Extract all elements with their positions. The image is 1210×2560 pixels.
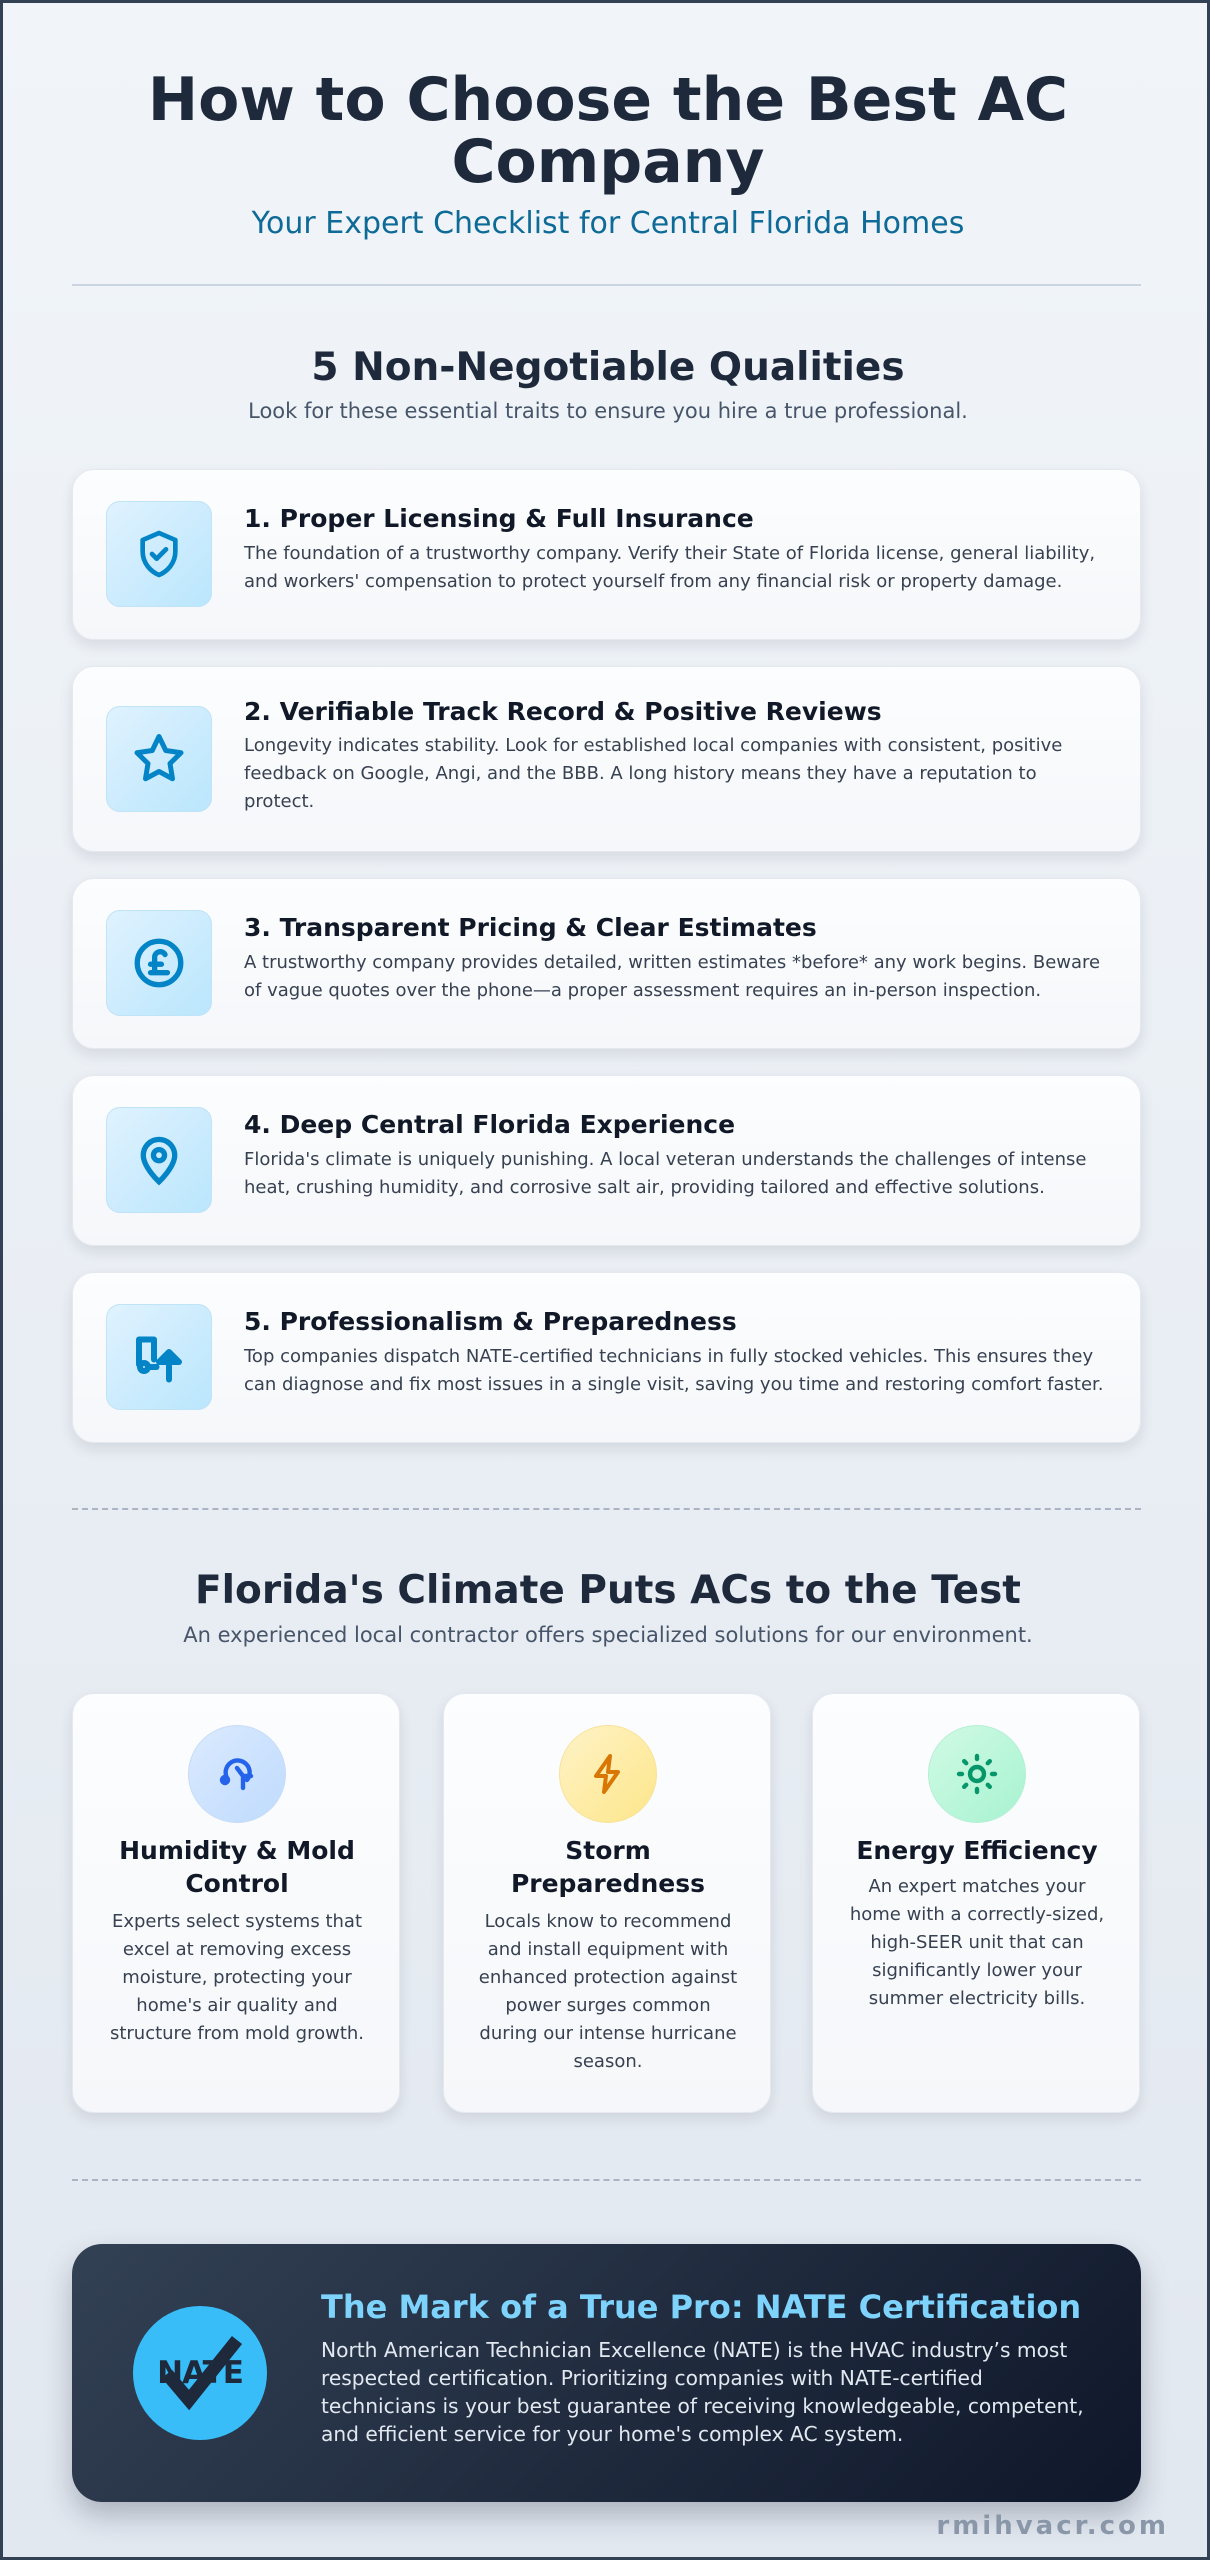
- NATE title: The Mark of a True Pro: NATE Certification: [321, 2288, 1081, 2326]
- energy text: An expert matches your home with a correctly-sized, high-SEER unit that can significantly lower your summer electricity bills.: [850, 1876, 1104, 2009]
- card 4: experience: [72, 1075, 1141, 1246]
- card 3 title: 3. Transparent Pricing & Clear Estimates: [244, 913, 817, 942]
- humidity title: Control: [185, 1869, 289, 1898]
- title: How to Choose the Best AC: [148, 65, 1068, 135]
- NATE text: North American Technician Excellence (NATE) is the HVAC industry’s most: [321, 2338, 1067, 2362]
- card 1 text: The foundation of a trustworthy company. Verify their State of Florida license, general liability, and workers' compensation to protect yourself from any financial risk or property damage.: [244, 543, 1095, 592]
- panel: energy: [812, 1693, 1140, 2113]
- humidity title: Humidity & Mold: [119, 1836, 355, 1865]
- subtitle: Your Expert Checklist for Central Florida Homes: [252, 206, 964, 241]
- climate description: An experienced local contractor offers specialized solutions for our environment.: [183, 1623, 1033, 1647]
- icon: shield: [106, 501, 212, 607]
- storm title: [511, 1836, 705, 1898]
- card 1: licensing: [72, 469, 1141, 640]
- footer brand: rmihvacr.com: [936, 2511, 1169, 2541]
- storm text: Locals know to recommend and install equipment with enhanced protection against power surges common during our intense hurricane season.: [479, 1911, 737, 2072]
- card 2 text: Longevity indicates stability. Look for established local companies with consistent, positive feedback on Google, Angi, and the BBB. A long history means they have a reputation to protect.: [244, 735, 1062, 812]
- panel: NATE certification: [72, 2244, 1141, 2502]
- heading: climate: Florida's Climate Puts ACs to the Test: [195, 1568, 1021, 1613]
- icon: star: [106, 706, 212, 812]
- icon: sun: [928, 1725, 1026, 1823]
- card 2: reviews: [72, 666, 1141, 852]
- NATE text: [321, 2338, 1084, 2446]
- card 5: professionalism: [72, 1272, 1141, 1443]
- title: [148, 65, 1068, 197]
- humidity title: [119, 1836, 355, 1898]
- icon: NATE badge: NATE: [157, 2355, 243, 2391]
- heading: qualities: 5 Non-Negotiable Qualities: [311, 345, 905, 390]
- energy title: Energy Efficiency: [856, 1836, 1098, 1865]
- icon: map pin: [106, 1107, 212, 1213]
- icon: humidity: [188, 1725, 286, 1823]
- storm title: Preparedness: [511, 1869, 705, 1898]
- icon: truck: [106, 1304, 212, 1410]
- card 4 text: Florida's climate is uniquely punishing. A local veteran understands the challenges of intense heat, crushing humidity, and corrosive salt air, providing tailored and effective solutions.: [244, 1149, 1086, 1198]
- icon: NATE badge: [133, 2306, 267, 2440]
- card 3: pricing: [72, 878, 1141, 1049]
- title: Company: [451, 127, 765, 197]
- NATE text: and efficient service for your home's complex AC system.: [321, 2422, 903, 2446]
- card 4 title: 4. Deep Central Florida Experience: [244, 1110, 735, 1139]
- card 5 title: 5. Professionalism & Preparedness: [244, 1307, 737, 1336]
- panel: humidity: [72, 1693, 400, 2113]
- card 3 text: A trustworthy company provides detailed, written estimates *before* any work begins. Beware of vague quotes over the phone—a proper assessment requires an in-person inspection.: [244, 952, 1100, 1001]
- section description: Look for these essential traits to ensure you hire a true professional.: [248, 399, 968, 423]
- card 5 text: Top companies dispatch NATE-certified technicians in fully stocked vehicles. This ensures they can diagnose and fix most issues in a single visit, saving you time and restoring comfort faster.: [244, 1346, 1104, 1395]
- humidity text: Experts select systems that excel at removing excess moisture, protecting your home's air quality and structure from mold growth.: [110, 1911, 364, 2044]
- storm title: Storm: [565, 1836, 651, 1865]
- panel: storm: [443, 1693, 771, 2113]
- card 1 title: 1. Proper Licensing & Full Insurance: [244, 504, 754, 533]
- icon: pound: [106, 910, 212, 1016]
- NATE text: respected certification. Prioritizing companies with NATE-certified: [321, 2366, 983, 2390]
- card 2 title: 2. Verifiable Track Record & Positive Reviews: [244, 697, 882, 726]
- NATE text: technicians is your best guarantee of receiving knowledgeable, competent,: [321, 2394, 1084, 2418]
- icon: lightning: [559, 1725, 657, 1823]
